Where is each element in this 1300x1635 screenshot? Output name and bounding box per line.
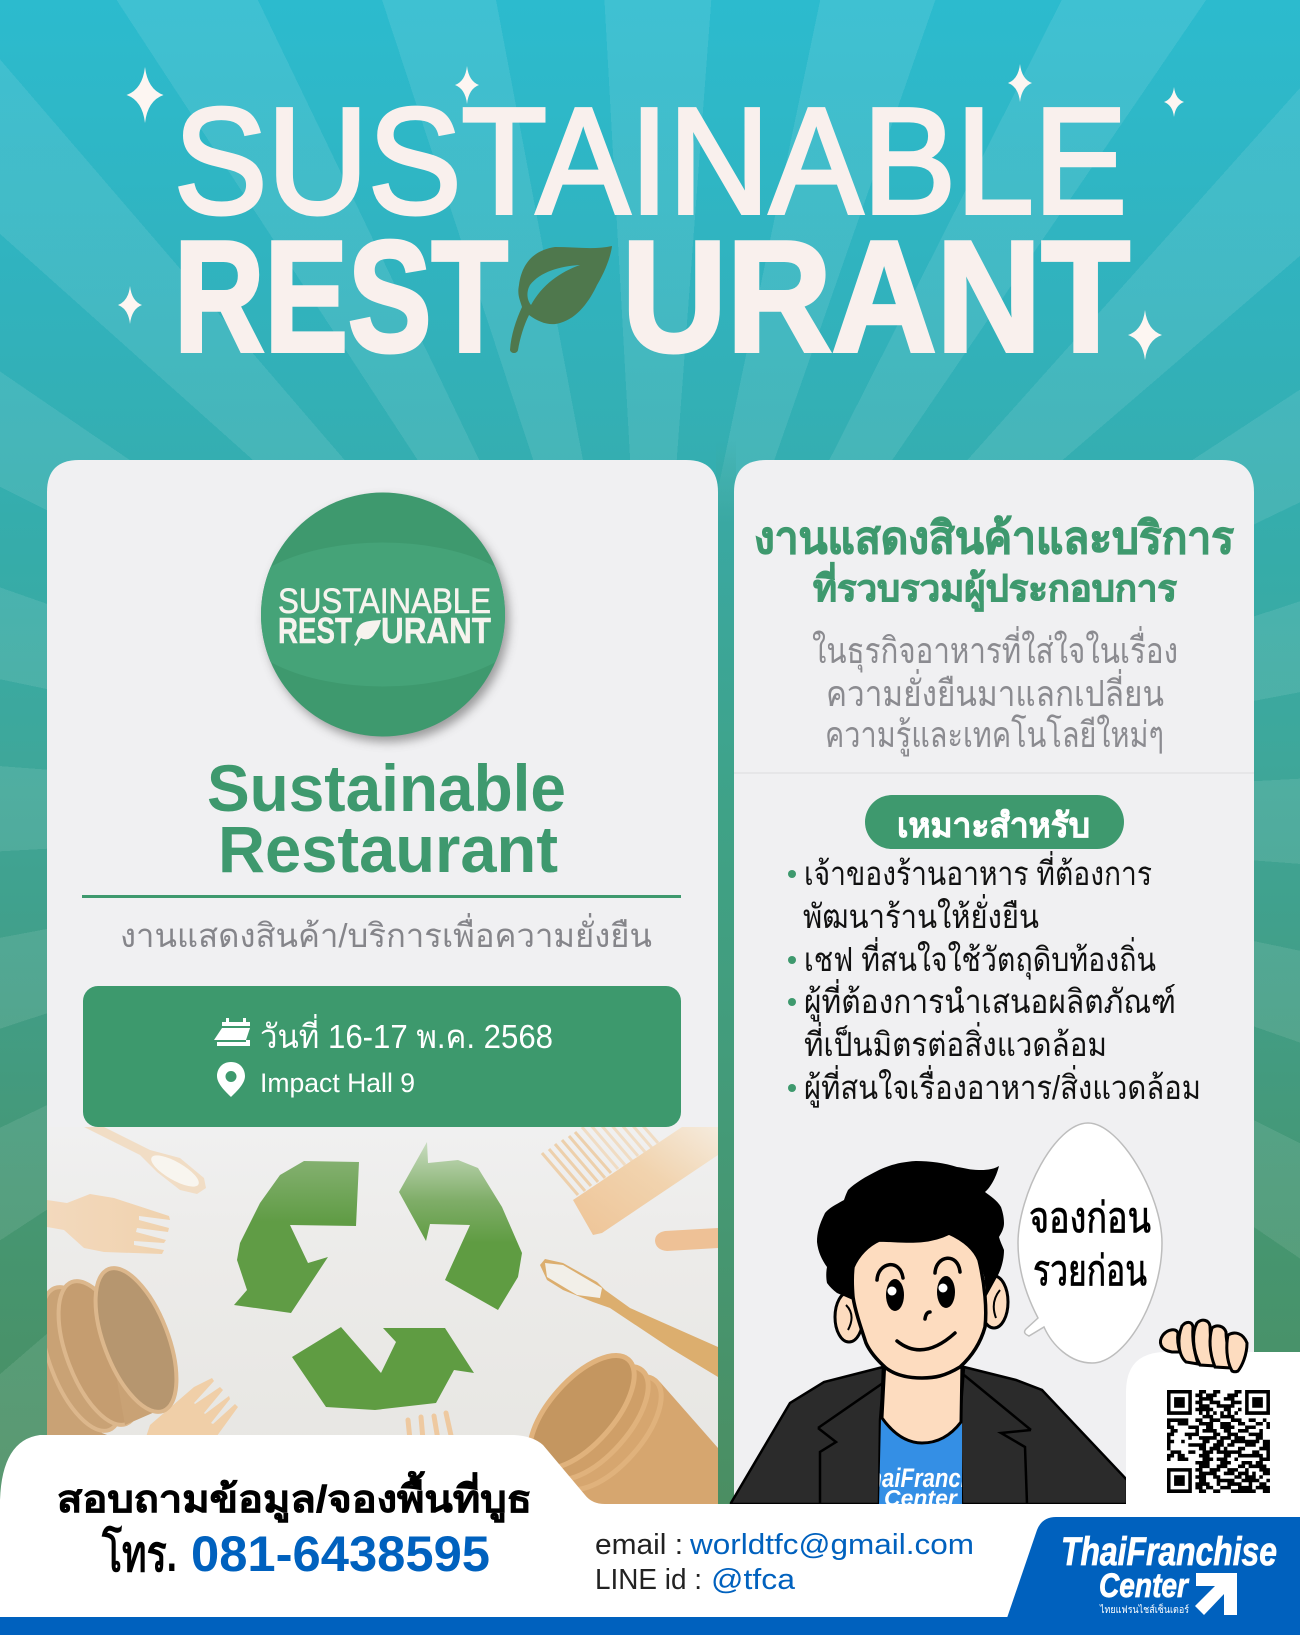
main title: SUSTAINABLE: [174, 76, 1127, 245]
jacket: [731, 1367, 1127, 1504]
right panel heading: ที่รวบรวมผู้ประกอบการ: [813, 562, 1177, 612]
wooden stick: [655, 1228, 718, 1251]
right panel heading: [754, 514, 1234, 612]
toothbrush top left: [80, 1125, 206, 1194]
audience bullet list: ผู้ที่ต้องการนำเสนอผลิตภัณฑ์: [804, 979, 1176, 1022]
hair: [817, 1161, 1004, 1300]
right panel heading: งานแสดงสินค้าและบริการ: [754, 514, 1234, 563]
toothbrush right: [540, 1259, 718, 1377]
phone number: 081-6438595: [191, 1526, 490, 1582]
event name heading: [207, 751, 566, 886]
speech bubble: จองก่อน: [1029, 1194, 1151, 1241]
QR code card: [1126, 1352, 1300, 1504]
logo badge: [259, 492, 515, 748]
venue text: Impact Hall 9: [260, 1068, 415, 1098]
email and LINE contacts: [595, 1529, 974, 1596]
comb top right: [541, 1127, 718, 1235]
audience badge: [865, 795, 1124, 849]
main title: URANT: [622, 209, 1130, 385]
ThaiFranchise Center logo: Center: [1099, 1567, 1189, 1605]
audience bullet list: เชฟ ที่สนใจใช้วัตถุดิบท้องถิ่น: [804, 937, 1156, 980]
event subtitle: งานแสดงสินค้า/บริการเพื่อความยั่งยืน: [120, 913, 652, 954]
date and venue box: [83, 986, 681, 1127]
contact heading: สอบถามข้อมูล/จองพื้นที่บูธ: [57, 1471, 532, 1523]
audience bullet list: เจ้าของร้านอาหาร ที่ต้องการ: [804, 851, 1152, 892]
cartoon character: [731, 1161, 1127, 1511]
event name heading: Restaurant: [218, 812, 558, 886]
logo badge: URANT: [381, 610, 491, 651]
t-shirt logo text: [879, 1468, 962, 1504]
email and LINE contacts: @tfca: [711, 1564, 796, 1596]
panel: who should attend: [731, 460, 1254, 1511]
audience bullet list: [788, 851, 1201, 1108]
ThaiFranchise Center logo: ไทยแฟรนไชส์เซ็นเตอร์: [1099, 1602, 1190, 1616]
small fork bottom centre: [408, 1413, 452, 1440]
logo badge: SUSTAINABLE: [278, 582, 491, 621]
photo: eco-friendly utensils with recycling symbol: [25, 1102, 718, 1507]
lapels: [818, 1375, 1031, 1504]
date text: วันที่ 16-17 พ.ค. 2568: [260, 1014, 553, 1055]
right panel description: ความรู้และเทคโนโลยีใหม่ๆ: [825, 714, 1164, 757]
audience bullet list: พัฒนาร้านให้ยั่งยืน: [803, 894, 1039, 935]
main title: REST: [174, 209, 508, 385]
QR code: [1167, 1390, 1270, 1493]
paper cups right: [528, 1353, 718, 1504]
event name heading: Sustainable: [207, 751, 566, 825]
speech bubble: [1018, 1123, 1162, 1363]
phone number: โทร.: [101, 1524, 177, 1582]
right panel description: [812, 626, 1178, 757]
eyebrows, nose and smile: [877, 1258, 960, 1350]
logo badge: REST: [278, 610, 352, 651]
right panel description: ความยั่งยืนมาแลกเปลี่ยน: [826, 669, 1164, 714]
audience badge: เหมาะสำหรับ: [897, 807, 1090, 845]
main title: [174, 76, 1130, 385]
decorative sparkles: [118, 64, 1184, 360]
bottom blue bar: [0, 1617, 1300, 1635]
t-shirt logo text: Center: [884, 1485, 958, 1511]
email and LINE contacts: email :: [595, 1529, 683, 1561]
icon: leaf in title: [510, 246, 612, 353]
audience bullet list: ผู้ที่สนใจเรื่องอาหาร/สิ่งแวดล้อม: [804, 1065, 1201, 1108]
blue t-shirt: [879, 1418, 962, 1504]
right panel description: ในธุรกิจอาหารที่ใส่ใจในเรื่อง: [812, 626, 1178, 673]
audience bullet list: ที่เป็นมิตรต่อสิ่งแวดล้อม: [804, 1022, 1107, 1063]
email and LINE contacts: LINE id :: [595, 1564, 702, 1596]
neck and face: [882, 1360, 962, 1443]
wooden fork left: [47, 1194, 170, 1254]
icon: arrow: [1195, 1573, 1237, 1615]
speech bubble: รวยก่อน: [1033, 1247, 1147, 1294]
email and LINE contacts: worldtfc@gmail.com: [689, 1529, 974, 1561]
t-shirt logo text: ThaiFranchise: [855, 1463, 1005, 1493]
wooden fork bottom left: [145, 1378, 238, 1440]
character hand: [1160, 1320, 1247, 1372]
bottom white contact band: [0, 1435, 1300, 1617]
eyes: [886, 1276, 955, 1311]
recycling symbol: [234, 1142, 522, 1410]
paper cups left: [47, 1266, 178, 1435]
ears: [835, 1276, 1008, 1342]
ThaiFranchise Center logo: [1007, 1517, 1300, 1618]
panel: event details: [25, 460, 718, 1507]
icon: location pin: [217, 1062, 245, 1097]
icon: calendar: [214, 1018, 250, 1046]
